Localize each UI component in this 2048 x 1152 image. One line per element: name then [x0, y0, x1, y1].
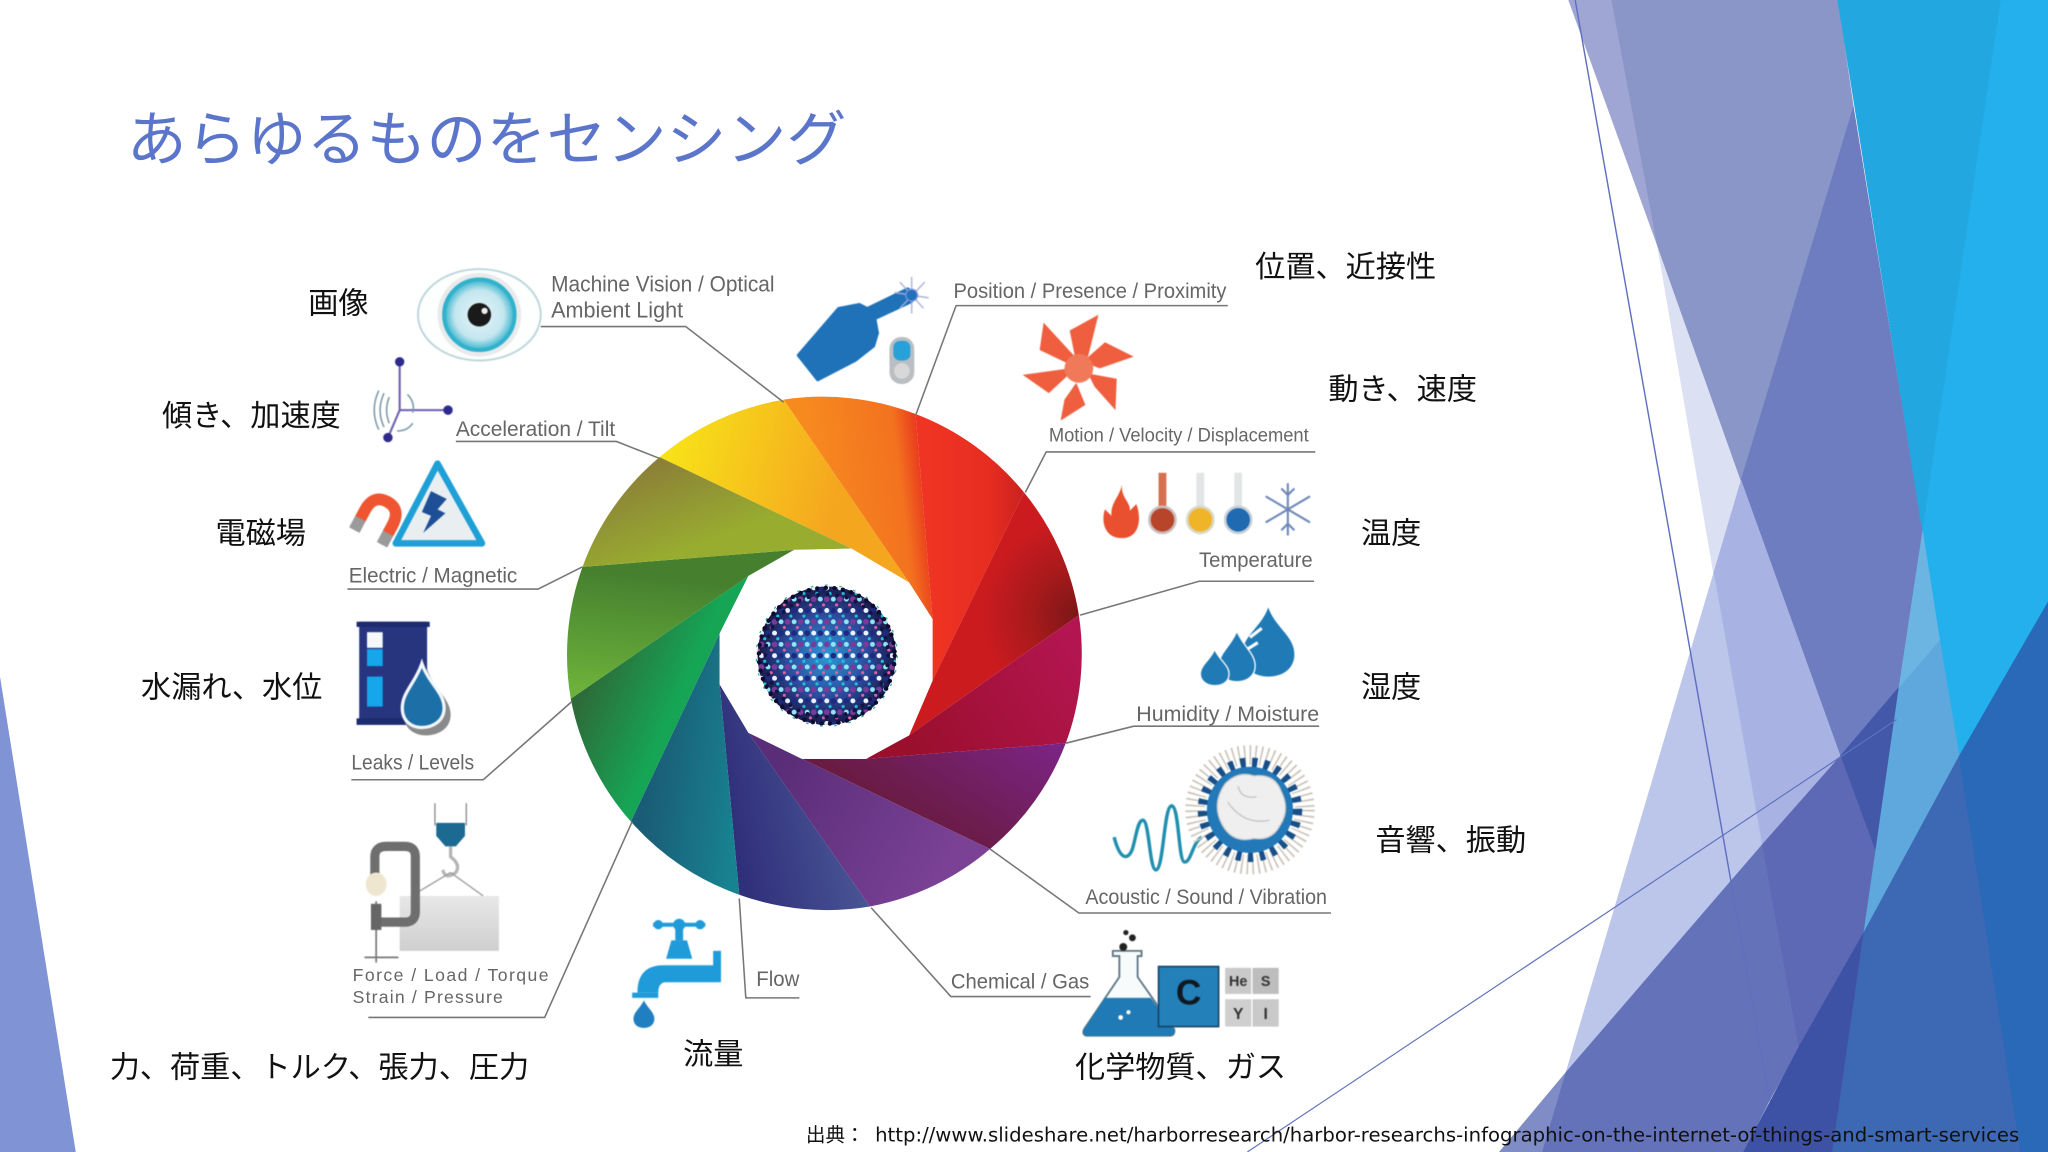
right facet decoration — [1247, 0, 2048, 1152]
icon: acceleration axes — [374, 357, 453, 442]
label: position: Position / Presence / Proximity — [953, 280, 1227, 303]
blade: dark red — [909, 492, 1079, 735]
japanese captions: 傾き、加速度 — [162, 399, 341, 433]
japanese captions: 化学物質、ガス — [1075, 1051, 1286, 1085]
label: acoustic: Acoustic / Sound / Vibration — [1085, 884, 1327, 909]
icon: periodic tiles: Y — [1233, 1006, 1244, 1023]
source citation: 出典： — [806, 1125, 865, 1147]
icon: eye — [418, 269, 541, 360]
dotted sphere — [756, 585, 897, 726]
icon: chemical flask — [1083, 930, 1174, 1036]
blade: olive — [583, 457, 852, 567]
japanese captions: 流量 — [683, 1038, 743, 1071]
icon: leak barrel — [357, 622, 451, 735]
label: leaks: Leaks / Levels — [351, 751, 474, 774]
japanese captions: 湿度 — [1361, 670, 1421, 704]
label: machine vision: Ambient Light — [551, 297, 683, 322]
icon: acoustic wave and burst — [1114, 755, 1305, 870]
blade: light green — [567, 550, 794, 699]
icon: humidity drops — [1200, 607, 1294, 686]
japanese captions: 力、荷重、トルク、張力、圧力 — [110, 1051, 529, 1085]
blade: green — [571, 576, 748, 822]
japanese captions: 電磁場 — [216, 516, 306, 550]
label: temperature: Temperature — [1199, 549, 1313, 572]
japanese captions: 動き、速度 — [1328, 373, 1477, 407]
label: motion: Motion / Velocity / Displacement — [1049, 425, 1309, 446]
label: force: Strain / Pressure — [353, 987, 503, 1007]
blade: violet — [748, 733, 990, 906]
label: machine vision — [551, 271, 775, 322]
icon: pointing hand — [798, 277, 929, 380]
blade: orange — [784, 397, 933, 619]
source citation: http://www.slideshare.net/harborresearch/harbor-researchs-infographic-on-the-internet-of-things-and-smart-services — [875, 1124, 2019, 1147]
label: chemical: Chemical / Gas — [951, 969, 1089, 994]
title: あらゆるものをセンシング — [127, 107, 846, 174]
icon: periodic tiles: He — [1229, 974, 1247, 990]
japanese captions: 音響、振動 — [1375, 823, 1526, 857]
blade: red — [916, 414, 1024, 680]
japanese captions: 温度 — [1361, 516, 1421, 550]
blade: teal — [631, 633, 739, 895]
colour wheel — [567, 397, 1082, 910]
blade: purple — [802, 743, 1066, 849]
icon: periodic tiles — [1159, 967, 1279, 1027]
left corner facet — [0, 677, 76, 1152]
wheel centre opening — [720, 549, 933, 759]
label: force: Force / Load / Torque — [353, 965, 549, 985]
label: electric: Electric / Magnetic — [349, 563, 517, 588]
icon: periodic tiles: C — [1176, 973, 1201, 1012]
icon: periodic tiles: I — [1263, 1006, 1268, 1023]
japanese captions: 水漏れ、水位 — [141, 670, 322, 704]
icon: temperature row — [1103, 473, 1310, 538]
icon: proximity switch — [889, 337, 914, 384]
leader lines — [347, 306, 1331, 1017]
japanese captions: 位置、近接性 — [1255, 250, 1436, 284]
japanese captions: 画像 — [308, 286, 369, 320]
icon: faucet — [632, 919, 721, 1028]
label: acceleration: Acceleration / Tilt — [456, 418, 615, 441]
blade: yellow — [660, 400, 909, 583]
label: force — [353, 965, 549, 1007]
blade: crimson — [866, 615, 1082, 759]
icon: electric and magnet — [354, 464, 482, 545]
japanese captions — [110, 250, 1526, 1085]
label: humidity: Humidity / Moisture — [1136, 703, 1319, 726]
icon: periodic tiles: S — [1261, 974, 1271, 990]
blade: indigo — [720, 684, 870, 910]
icon: force clamp and hook — [364, 803, 499, 963]
label: flow: Flow — [756, 968, 800, 991]
label: machine vision: Machine Vision / Optical — [551, 271, 775, 296]
icon: fan — [1023, 315, 1134, 421]
